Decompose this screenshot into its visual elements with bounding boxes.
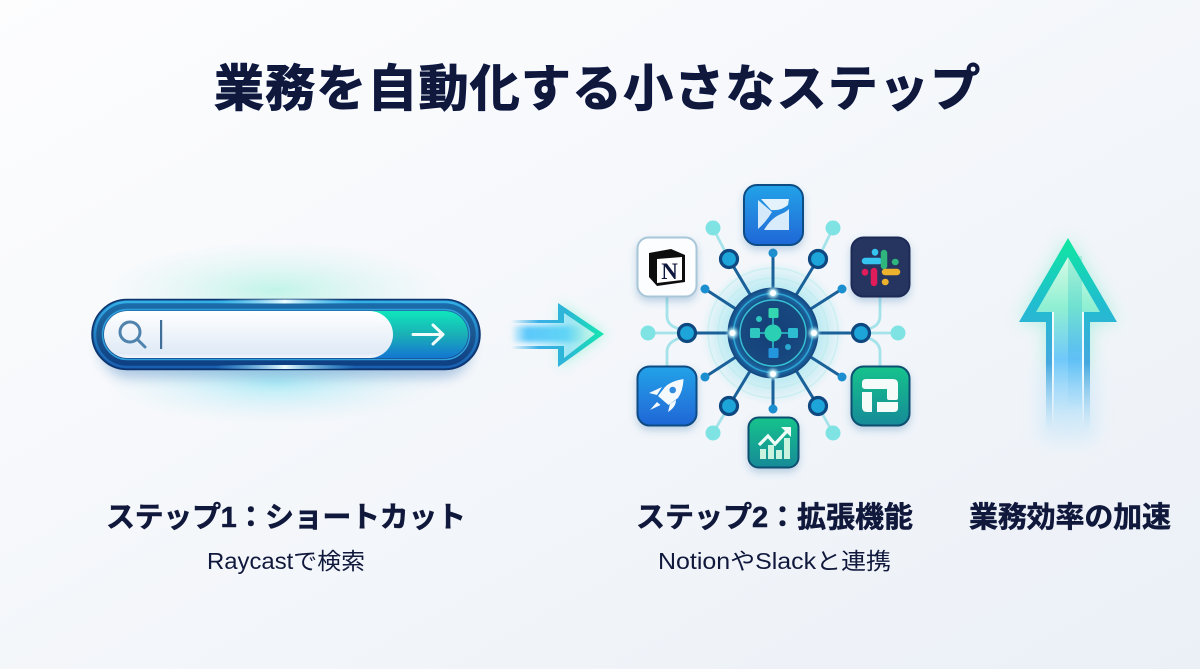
step 1 heading: ステップ1：ショートカット: [106, 501, 466, 534]
small nodes: [700, 248, 846, 414]
icon: Slack: [852, 238, 910, 296]
light nodes: [640, 220, 906, 440]
arrow: efficiency acceleration: [1019, 238, 1117, 440]
connector lines: dark spokes: [687, 253, 861, 409]
icon: rocket app: [638, 366, 696, 426]
hub glow rings: [701, 261, 845, 405]
step 2 heading: ステップ2：拡張機能: [636, 501, 913, 534]
step 1 description: Raycastで検索: [207, 548, 365, 574]
icon: mail app: [744, 185, 803, 245]
icon: right arrow in button: [413, 325, 443, 344]
search bar: shortcut launcher: [92, 242, 480, 424]
action button: [300, 311, 468, 358]
icon: Notion: N: [661, 259, 678, 284]
step 2 label: [636, 501, 913, 574]
outer rim: [92, 300, 480, 370]
input field: [104, 311, 393, 358]
step 1 label: [106, 501, 466, 574]
extension hub network: [638, 185, 910, 468]
acceleration label: 業務効率の加速: [969, 501, 1171, 534]
step 2 description: NotionやSlackと連携: [658, 548, 891, 574]
icon: green blocks app: [852, 366, 910, 426]
central hub disc: [728, 288, 819, 379]
icon: growth chart app: [748, 418, 798, 468]
icon: magnifier: [120, 322, 145, 347]
arrow: step 1 to step 2: [511, 303, 606, 367]
icon: Notion: [638, 238, 696, 296]
connector lines: light branches: [648, 228, 898, 433]
title: 業務を自動化する小さなステップ: [214, 61, 980, 117]
text cursor: [160, 320, 162, 349]
large nodes: [678, 250, 870, 414]
